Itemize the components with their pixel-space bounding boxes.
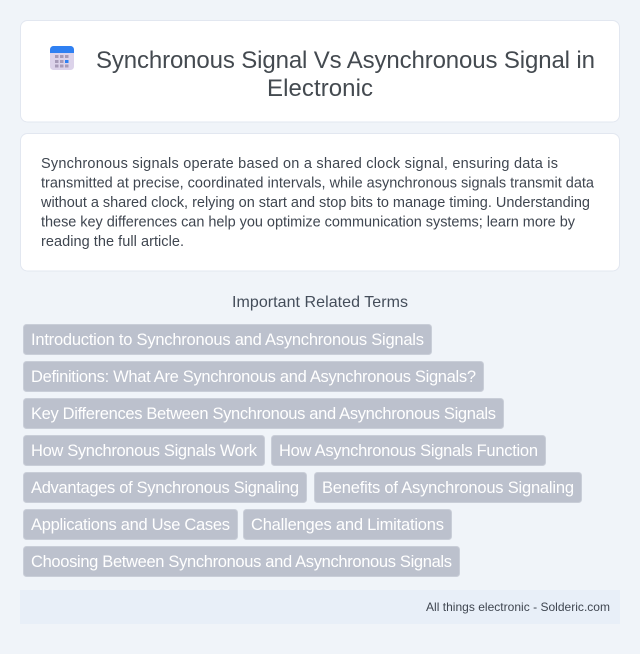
text block: intro: without a shared clock, relying on start and stop bits to manage timing. Understanding [40,195,590,211]
heading: related terms: Important Related Terms [232,294,408,311]
icon: calendar [50,46,74,70]
tag: advantages: Advantages of Synchronous Signaling [31,479,299,497]
text block: intro [40,156,595,250]
footer: All things electronic - Solderic.com [426,600,610,614]
tag: challenges: Challenges and Limitations [251,516,444,534]
text block: intro: Synchronous signals operate based on a shared clock signal, ensuring data is [41,156,558,172]
tag: advantages [24,472,306,502]
text block: intro: these key differences can help you optimize communication systems; learn more by [41,214,576,230]
tag: challenges [244,510,452,540]
panel: header [20,20,620,122]
tag: applications: Applications and Use Cases [31,516,230,534]
tag: benefits: Benefits of Asynchronous Signaling [322,479,574,497]
title: Electronic [267,75,373,102]
tag: introduction: Introduction to Synchronous and Asynchronous Signals [31,331,424,349]
tag: key differences: Key Differences Between Synchronous and Asynchronous Signals [31,405,496,423]
footer [20,590,620,624]
tag list [24,324,582,576]
text block: intro: reading the full article. [41,234,184,250]
tag: asynchronous function [272,436,546,466]
tag: choosing: Choosing Between Synchronous and Asynchronous Signals [31,553,452,571]
tag: key differences [24,398,504,428]
tag: definitions: Definitions: What Are Synchronous and Asynchronous Signals? [31,368,476,386]
tag: introduction [24,324,432,354]
tag: choosing [24,546,460,576]
text block: intro: transmitted at precise, coordinated intervals, while asynchronous signals transmit data [41,176,595,192]
title: Synchronous Signal Vs Asynchronous Signal in [96,47,595,74]
tag: synchronous work [24,436,264,466]
tag: benefits [314,472,582,502]
title [96,47,595,102]
tag: definitions [24,362,484,392]
tag: asynchronous function: How Asynchronous Signals Function [279,442,538,460]
panel: intro text [20,134,620,271]
tag: synchronous work: How Synchronous Signals Work [31,442,258,460]
tag: applications [24,510,238,540]
